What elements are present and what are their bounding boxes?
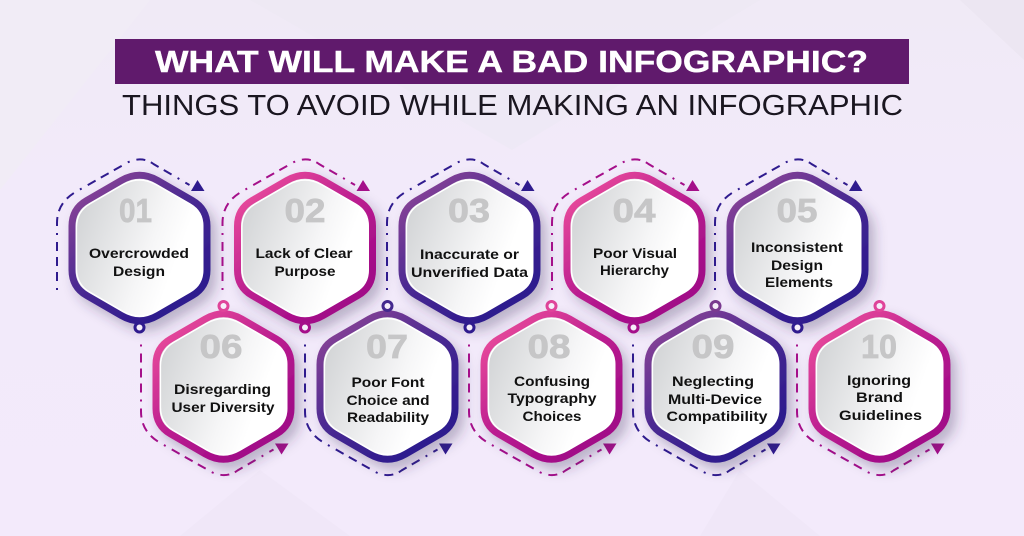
step 06 — [141, 302, 291, 475]
title banner — [115, 39, 909, 84]
step 05: Design — [771, 257, 823, 273]
step 02: Purpose — [274, 263, 336, 279]
step 01: Design — [113, 263, 165, 279]
step 02 — [222, 159, 372, 332]
step 05: Inconsistent — [751, 239, 843, 255]
step 08: Choices — [522, 408, 582, 424]
step 04: Hierarchy — [600, 262, 669, 278]
step 06: Disregarding — [174, 381, 271, 397]
step 05 — [715, 159, 865, 332]
step 07 — [305, 302, 455, 475]
step 10: Brand — [856, 389, 903, 405]
subtitle: THINGS TO AVOID WHILE MAKING AN INFOGRAPHIC — [122, 90, 903, 122]
step 01: 01 — [119, 192, 152, 229]
step 08: 08 — [528, 328, 570, 365]
step 03: Inaccurate or — [420, 246, 520, 262]
step 09: 09 — [692, 328, 734, 365]
step 05: 05 — [776, 192, 818, 229]
step 08: Typography — [508, 390, 597, 406]
step 07: Poor Font — [352, 374, 425, 390]
step 10 — [797, 302, 947, 475]
step 03 — [387, 159, 537, 332]
step 07: Choice and — [346, 392, 430, 408]
step 03: Unverified Data — [411, 264, 528, 280]
step 07: 07 — [366, 328, 408, 365]
step 08: Confusing — [514, 373, 590, 389]
step 08 — [469, 302, 619, 475]
step 07: Readability — [347, 409, 429, 425]
step 09: Multi-Device — [668, 391, 762, 407]
step 02: 02 — [284, 192, 326, 229]
step 10: Guidelines — [839, 407, 922, 423]
step 04: Poor Visual — [593, 245, 677, 261]
step 06: 06 — [200, 328, 242, 365]
step 06: User Diversity — [172, 399, 275, 415]
step 03: 03 — [448, 192, 490, 229]
step 10: Ignoring — [847, 372, 911, 388]
step 01: Overcrowded — [89, 245, 189, 261]
title banner: WHAT WILL MAKE A BAD INFOGRAPHIC? — [155, 44, 868, 79]
step 02: Lack of Clear — [256, 245, 353, 261]
step 10: 10 — [861, 328, 897, 365]
step 04: 04 — [612, 192, 656, 229]
step 05: Elements — [765, 274, 833, 290]
step 01 — [57, 159, 207, 332]
step 04 — [552, 159, 702, 332]
step 09: Compatibility — [666, 408, 768, 424]
step 09 — [633, 302, 783, 475]
step 09: Neglecting — [672, 373, 754, 389]
